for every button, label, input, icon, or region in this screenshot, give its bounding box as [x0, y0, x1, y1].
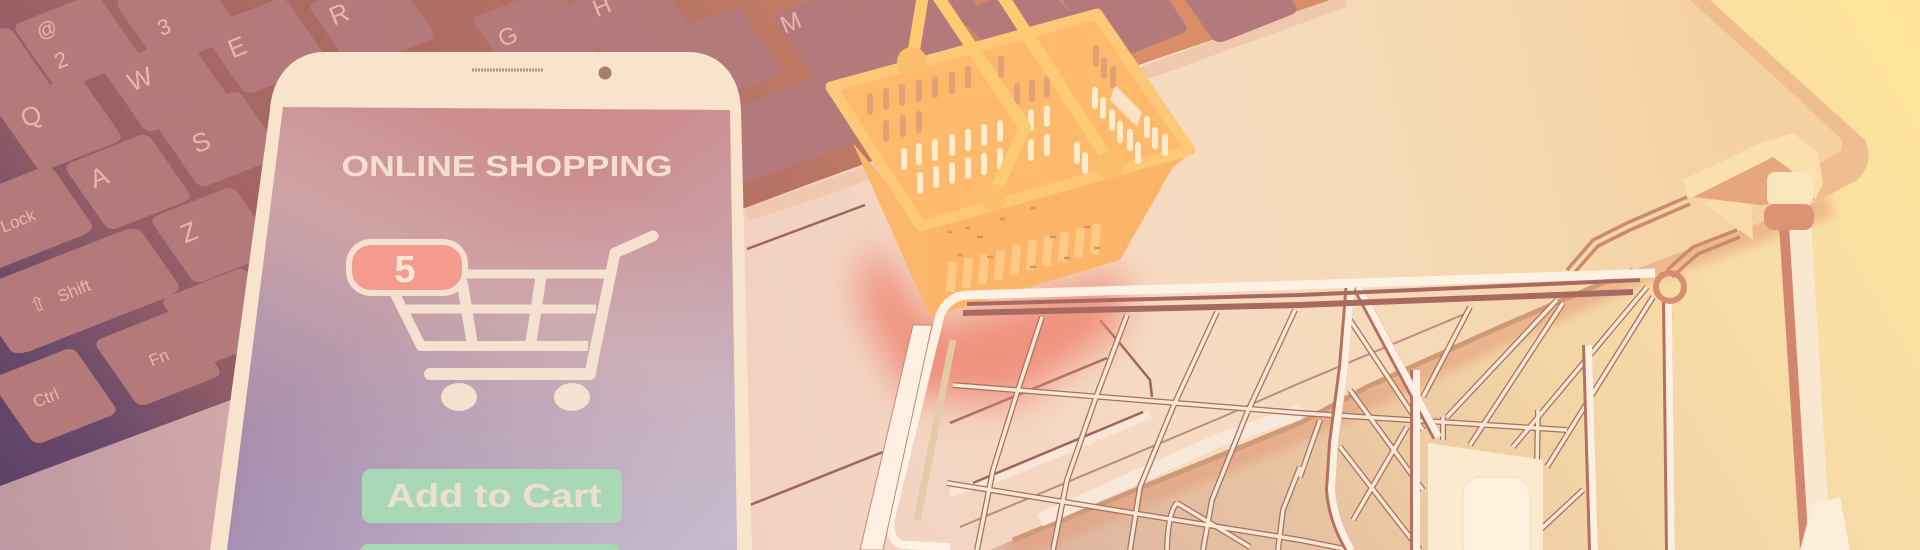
laptop rim [1690, 0, 1869, 205]
keyboard deck [0, 0, 1330, 486]
earpiece [472, 68, 543, 72]
key labels: @ [33, 16, 61, 44]
basket handles [912, 0, 1110, 197]
laptop shadow on table [1010, 205, 1830, 550]
basket dark holes [870, 48, 1113, 139]
keys [0, 0, 1300, 446]
second button [360, 544, 620, 550]
add to cart button [362, 469, 622, 523]
cart left post [860, 325, 932, 550]
key labels: Ctrl [30, 384, 62, 412]
keyboard [0, 0, 1345, 486]
basket front dashes [947, 208, 1100, 267]
key labels: S [187, 125, 215, 159]
basket interior and rim [831, 14, 1190, 226]
cart wire underlay [947, 287, 1653, 550]
key labels: A [85, 160, 113, 194]
badge number: 5 [394, 249, 416, 291]
cart rails [967, 280, 1640, 304]
key labels: M [777, 7, 805, 39]
keyboard front lip [747, 0, 1345, 214]
cart handle arms [1567, 197, 1740, 277]
add to cart button: Add to Cart [386, 477, 602, 514]
key labels: Z [176, 215, 202, 249]
key labels: 3 [154, 13, 174, 41]
cart handle joint [1683, 133, 1823, 200]
key labels: Shift [55, 276, 94, 306]
key labels [0, 0, 805, 412]
cart white tag [1428, 443, 1543, 550]
key labels: W [123, 60, 157, 98]
screen title: ONLINE SHOPPING [342, 151, 672, 183]
laptop lower edge strip [1013, 270, 1633, 540]
cart handle triangle [1703, 183, 1753, 240]
item count badge [349, 242, 465, 293]
basket see-through hole [1110, 85, 1142, 127]
shadow under basket [858, 240, 1125, 405]
cart side ties [917, 340, 953, 520]
cart base [1800, 497, 1850, 550]
basket front stripes [950, 224, 1097, 292]
handle knobs [897, 47, 1124, 210]
cart wheels [441, 383, 477, 411]
key labels: E [223, 30, 251, 64]
cart post highlight [1332, 282, 1672, 550]
key labels: ⇧ [26, 290, 50, 318]
key labels: 2 [51, 46, 71, 74]
phone screen [227, 107, 737, 550]
tag slot [1463, 477, 1530, 550]
key labels: Fn [146, 345, 172, 371]
cart collar [1767, 172, 1813, 206]
cart corner ring [1656, 273, 1684, 301]
key labels: G [494, 21, 522, 53]
basket body [853, 143, 1195, 317]
cart lower rail [890, 520, 950, 547]
front camera [598, 66, 612, 80]
cart post underlay [1330, 282, 1670, 550]
cart wire highlight [947, 287, 1653, 550]
cart pole [1785, 225, 1806, 550]
key labels: Q [16, 98, 46, 134]
phone body [210, 52, 752, 550]
palm rest white band [950, 415, 1150, 493]
wire shopping cart [860, 133, 1850, 550]
basket light holes [904, 90, 1165, 191]
touchpad and deck lines [747, 205, 1467, 527]
small orange basket [831, 0, 1195, 317]
cart icon [349, 236, 653, 411]
cart frame [590, 236, 653, 374]
smartphone [210, 52, 752, 550]
